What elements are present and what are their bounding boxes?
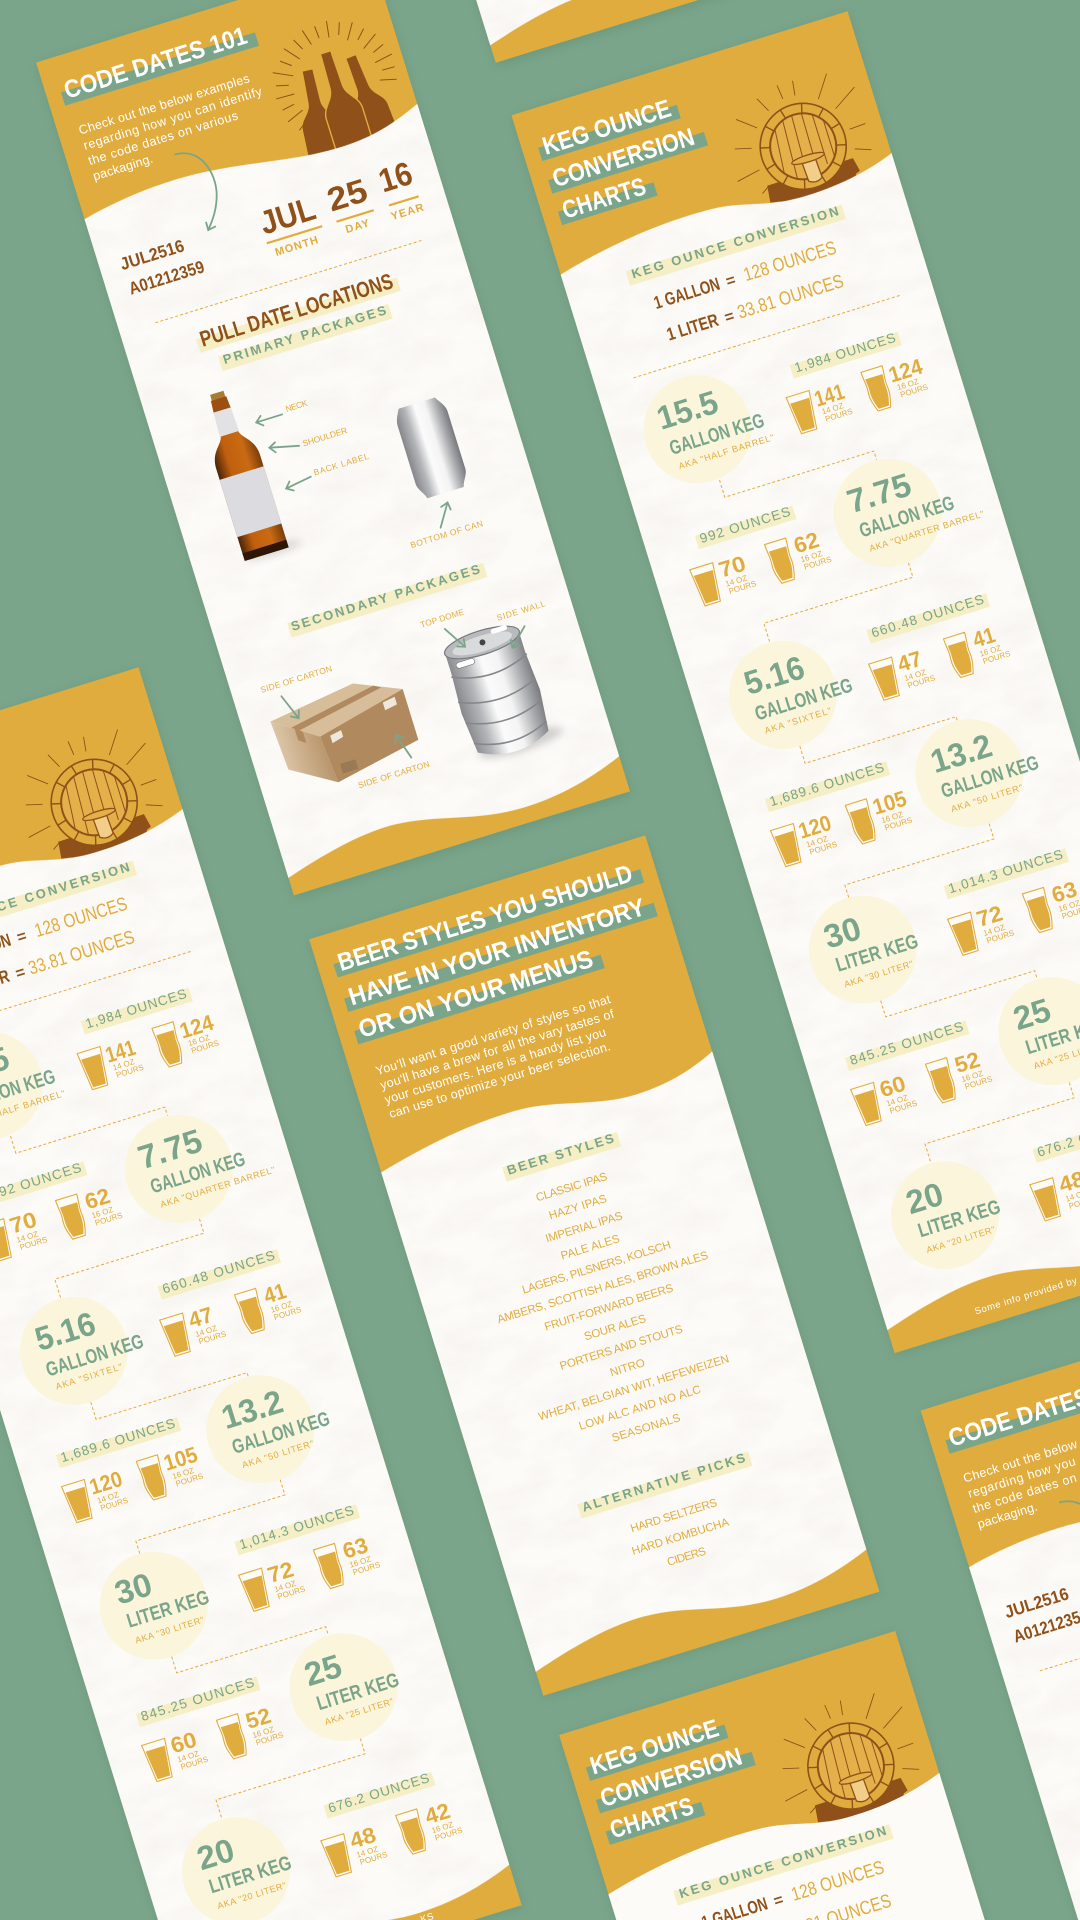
ounces label: 1,014.3 OUNCES (946, 847, 1065, 896)
row: 13.2 gallon keg (47, 1357, 342, 1542)
pours: POURS (273, 1305, 303, 1322)
pours: POURS (888, 1099, 918, 1116)
pours: POURS (179, 1755, 209, 1772)
keg circle: LITER KEG (124, 1587, 212, 1633)
conversion: gallon (0, 894, 130, 970)
paper body between waves (73, 102, 628, 883)
pours: 16 OZ (896, 377, 920, 392)
image: can (393, 395, 470, 500)
conversion: liter: 33.81 OUNCES (735, 271, 846, 324)
pours: 16 OZ (799, 549, 823, 564)
row: 15.5 gallon keg (0, 965, 228, 1153)
list: beer styles: PORTERS AND STOUTS (559, 1323, 685, 1373)
pours (689, 525, 834, 608)
row: 30 liter keg (795, 830, 1080, 1017)
row: 20 liter keg (168, 1752, 470, 1920)
code sample: JUL2516 (118, 235, 187, 274)
title (534, 87, 718, 226)
title: CHARTS (607, 1792, 697, 1844)
title: CONVERSION (597, 1743, 746, 1813)
keg circle: LITER KEG (206, 1852, 294, 1898)
pours: 14 OZ (821, 401, 845, 416)
pours: 14 OZ (885, 1093, 909, 1108)
keg circle: 20 (901, 1175, 948, 1221)
keg circle: AKA "25 LITER" (323, 1696, 395, 1727)
pours: POURS (352, 1560, 381, 1577)
pours: POURS (255, 1730, 285, 1747)
label: side of carton top: SIDE OF CARTON (259, 663, 334, 695)
image: keg (440, 616, 565, 765)
pours: 60 (167, 1727, 200, 1758)
list: beer styles: IMPERIAL IPAS (544, 1210, 624, 1245)
pours: 41 (970, 622, 998, 653)
pours: 16 OZ (90, 1205, 114, 1220)
heading: pull date locations: PULL DATE LOCATIONS (197, 268, 396, 352)
date breakdown: year: 16 (374, 154, 417, 199)
pours: POURS (276, 1584, 306, 1601)
keg circle (902, 701, 1051, 841)
keg circle: GALLON KEG (857, 492, 957, 542)
pours: 60 (876, 1071, 909, 1102)
pours: 14 OZ (805, 834, 829, 849)
label: side wall (495, 598, 555, 650)
pours: 47 (185, 1302, 216, 1333)
pours: POURS (899, 382, 929, 399)
pours: POURS (94, 1211, 124, 1228)
pours: POURS (884, 815, 913, 832)
list: beer styles: FRUIT-FORWARD BEERS (543, 1282, 675, 1334)
pours: 16 OZ (348, 1555, 372, 1570)
pours: 120 (86, 1466, 125, 1500)
row: 7.75 gallon keg (675, 434, 992, 625)
ounces label: 992 OUNCES (698, 504, 792, 546)
ounces label: 1,984 OUNCES (84, 986, 188, 1031)
keg circle: GALLON KEG (667, 410, 767, 460)
panel: beer styles (305, 833, 887, 1699)
list: beer styles: SOUR ALES (583, 1313, 648, 1343)
intro text: your customers. Here is a handy list you (383, 1025, 608, 1107)
pours (867, 619, 1013, 702)
pours: POURS (982, 649, 1012, 666)
icon: barrel (734, 74, 872, 203)
pours: 47 (894, 646, 925, 677)
code sample (1002, 1580, 1080, 1647)
ounces label: 676.2 OUNCES (326, 1770, 431, 1816)
pours: 14 OZ (903, 668, 927, 683)
pours: 52 (243, 1703, 274, 1734)
keg circle: AKA "SIXTEL" (54, 1361, 124, 1392)
row: 7.75 gallon keg (0, 1090, 283, 1281)
conversion: gallon: = (724, 272, 738, 291)
icon: barrel (26, 730, 162, 859)
heading: keg ounce conversion (0, 858, 137, 942)
label: shoulder (269, 424, 349, 458)
conversion: gallon: 128 OUNCES (741, 238, 839, 286)
heading: primary packages: PRIMARY PACKAGES (221, 302, 388, 367)
intro text (374, 992, 626, 1121)
keg circle: 25 (300, 1647, 346, 1693)
pours: 124 (177, 1009, 217, 1044)
heading: keg ounce conversion: KEG OUNCE CONVERSION (630, 203, 840, 281)
conversion: liter: 33.81 OUNCES (26, 927, 137, 980)
title (330, 856, 668, 1045)
pours: 141 (811, 379, 847, 412)
keg circle (193, 1357, 342, 1497)
image: carton box (267, 670, 423, 796)
heading: pull date locations (193, 267, 401, 353)
label: side of carton bottom (347, 728, 431, 790)
list: beer styles: CLASSIC IPAS (535, 1171, 609, 1204)
conversion: gallon (651, 238, 839, 314)
label: bottom of can: BOTTOM OF CAN (409, 518, 485, 550)
keg circle: 13.2 (926, 726, 996, 780)
ounces label: 1,689.6 OUNCES (768, 760, 886, 809)
ounces label: 845.25 OUNCES (139, 1675, 256, 1724)
intro text: the code dates on various (87, 109, 240, 168)
ounces label: 845.25 OUNCES (848, 1019, 965, 1068)
keg circle (6, 1279, 156, 1418)
intro text (77, 69, 274, 183)
heading: secondary packages: SECONDARY PACKAGES (289, 561, 482, 634)
pours: 48 (347, 1822, 379, 1854)
pours (76, 1009, 222, 1092)
keg circle: AKA "SIXTEL" (763, 705, 833, 736)
row: 25 liter keg (127, 1619, 412, 1801)
code sample: JUL2516 (1002, 1583, 1071, 1622)
pours: POURS (985, 928, 1015, 945)
label: neck: NECK (284, 398, 309, 414)
title: KEG OUNCE (587, 1714, 722, 1780)
icon: barrel (782, 1693, 920, 1822)
keg circle: AKA "50 LITER" (950, 782, 1024, 814)
keg circle: AKA "HALF BARREL" (677, 432, 776, 471)
pours: POURS (190, 1038, 220, 1055)
row: 5.16 gallon keg (6, 1231, 309, 1418)
title: OR ON YOUR MENUS (355, 945, 596, 1044)
row: 5.16 gallon keg (715, 575, 1018, 762)
connectors (718, 434, 1080, 1164)
conversion: liter: = (14, 964, 27, 983)
keg circle: 5.16 (740, 648, 809, 702)
keg circle: 7.75 (133, 1122, 206, 1176)
pours: 62 (82, 1183, 113, 1214)
list: alternative picks: HARD SELTZERS (629, 1497, 719, 1535)
label: back label (283, 451, 371, 489)
pours (946, 874, 1080, 957)
label: top dome (419, 607, 475, 657)
pours: 14 OZ (355, 1844, 379, 1860)
pours (320, 1796, 465, 1879)
list: beer styles: HAZY IPAS (548, 1193, 609, 1222)
pours: 105 (161, 1442, 200, 1476)
ounces label: 660.48 OUNCES (869, 592, 986, 641)
keg circle: GALLON KEG (230, 1408, 333, 1459)
keg circle (0, 1013, 72, 1153)
pours: 16 OZ (431, 1820, 455, 1835)
keg circle (795, 882, 931, 1017)
pours: 16 OZ (269, 1299, 293, 1315)
intro text: packaging. (91, 152, 155, 183)
panel: keg ounce conversion charts, left (0, 665, 529, 1920)
paper body (969, 1522, 1080, 1920)
keg circle (276, 1619, 412, 1755)
keg circle: AKA "20 LITER" (216, 1880, 288, 1911)
pours (158, 1275, 304, 1358)
conversion: gallon: 1 GALLON (651, 274, 722, 313)
row: 20 liter keg (877, 1096, 1080, 1283)
pours: 14 OZ (194, 1324, 218, 1339)
pours: 14 OZ (724, 573, 748, 589)
conversion: liter (664, 271, 846, 345)
pours: 42 (422, 1798, 453, 1829)
intro text (962, 1417, 1080, 1531)
keg circle: AKA "QUARTER BARREL" (868, 508, 986, 553)
pours: POURS (198, 1329, 227, 1346)
arrow (1060, 1494, 1080, 1581)
keg circle: AKA "30 LITER" (843, 959, 915, 989)
row: 13.2 gallon keg (756, 701, 1051, 886)
pours: 16 OZ (171, 1466, 195, 1481)
code sample (118, 232, 207, 299)
list: beer styles: AMBERS, SCOTTISH ALES, BROWN ALES (496, 1250, 710, 1326)
pours: POURS (434, 1826, 464, 1843)
keg circle: 7.75 (842, 466, 915, 520)
keg circle: GALLON KEG (939, 752, 1042, 803)
date breakdown: day: DAY (344, 217, 372, 236)
pours: POURS (115, 1063, 145, 1080)
pours: 63 (1049, 876, 1080, 908)
keg circle (820, 434, 992, 580)
pours: 16 OZ (251, 1725, 275, 1740)
panel: keg ounce conversion charts, bottom (559, 1631, 985, 1920)
paper body (551, 149, 1080, 1333)
keg circle (985, 963, 1080, 1099)
list: alternative picks: HARD KOMBUCHA (630, 1516, 731, 1558)
label: side wall: SIDE WALL (495, 598, 547, 623)
pours: 16 OZ (960, 1069, 984, 1084)
pours: 63 (340, 1532, 371, 1564)
conversion: liter (0, 927, 137, 1001)
pours (849, 1045, 995, 1128)
pours: 72 (973, 900, 1006, 932)
keg circle (168, 1803, 305, 1920)
pours (785, 353, 931, 436)
pours: POURS (99, 1496, 129, 1513)
list: beer styles: LOW ALC AND NO ALC (578, 1384, 702, 1433)
pours: 141 (102, 1035, 138, 1068)
code sample: A01212359 (126, 256, 207, 299)
pours: 124 (886, 353, 926, 388)
ounces label: 1,014.3 OUNCES (237, 1503, 356, 1552)
pours: 14 OZ (112, 1057, 136, 1072)
title: BEER STYLES YOU SHOULD (334, 859, 636, 977)
pours: 16 OZ (880, 810, 904, 825)
keg circle: 30 (110, 1565, 156, 1612)
keg circle: LITER KEG (833, 931, 921, 977)
connectors (9, 1090, 371, 1820)
row: 15.5 gallon keg (630, 309, 937, 497)
ounces label: 1,984 OUNCES (793, 330, 897, 375)
title: KEG OUNCE (539, 95, 674, 161)
pours: 105 (870, 786, 909, 820)
conversion: liter: 1 LITER (664, 310, 721, 345)
pours: 16 OZ (978, 643, 1002, 659)
conversion: gallon: = (772, 1891, 786, 1910)
keg circle: 13.2 (217, 1382, 287, 1436)
pours: POURS (175, 1471, 204, 1488)
pours: 14 OZ (176, 1749, 200, 1764)
list: alternative picks (624, 1495, 737, 1578)
ounces label: 660.48 OUNCES (160, 1248, 277, 1297)
image: bottle (195, 382, 303, 565)
keg circle: AKA "30 LITER" (134, 1615, 206, 1645)
paper body (0, 805, 522, 1920)
label: side of carton bottom: SIDE OF CARTON (357, 759, 431, 790)
label: back label: BACK LABEL (312, 451, 371, 477)
label: neck (254, 398, 309, 423)
pours: POURS (824, 407, 854, 424)
arrow: curved arrow to code (175, 146, 228, 233)
date breakdown: month: MONTH (274, 234, 321, 259)
date breakdown: year: YEAR (390, 201, 426, 223)
pours (140, 1701, 286, 1784)
pours: POURS (728, 579, 757, 596)
panel: code dates 101 (28, 0, 634, 902)
keg circle: LITER KEG (314, 1669, 402, 1715)
pours (237, 1530, 383, 1613)
title: CONVERSION (549, 123, 698, 193)
pours: 52 (952, 1047, 983, 1078)
date breakdown: year (374, 154, 426, 223)
heading: beer styles: BEER STYLES (505, 1130, 616, 1178)
list: beer styles: LAGERS, PILSNERS, KOLSCH (521, 1239, 672, 1297)
keg circle (86, 1538, 222, 1673)
keg circle: 5.16 (31, 1304, 100, 1358)
pours: 14 OZ (15, 1229, 39, 1245)
date breakdown: month: JUL (255, 189, 320, 241)
pours: 70 (716, 551, 749, 583)
keg circle (630, 357, 781, 497)
keg circle: 20 (192, 1831, 239, 1877)
keg circle: LITER KEG (915, 1196, 1003, 1242)
date breakdown: day: 25 (322, 171, 372, 218)
panel: code dates 101, bottom right (920, 1361, 1080, 1920)
heading: alternative picks: ALTERNATIVE PICKS (580, 1450, 747, 1515)
paper body (371, 1046, 879, 1674)
keg circle: AKA "QUARTER BARREL" (159, 1164, 277, 1209)
conversion: gallon: = (15, 928, 29, 947)
pours: POURS (964, 1074, 994, 1091)
list: beer styles: WHEAT, BELGIAN WIT, HEFEWEIZEN (537, 1353, 731, 1423)
keg circle: GALLON KEG (148, 1148, 248, 1198)
pours (769, 786, 915, 869)
title (582, 1707, 766, 1846)
intro text: packaging. (976, 1500, 1039, 1531)
date breakdown: day (322, 171, 379, 239)
title: CHARTS (559, 172, 649, 225)
keg circle (877, 1147, 1014, 1283)
intro text: regarding how you can identify (82, 84, 264, 153)
intro text: you'll have a brew for all the vary tastes of (378, 1007, 616, 1092)
conversion: liter: = (723, 308, 736, 327)
pours: POURS (803, 555, 833, 572)
list: beer styles: PALE ALES (559, 1233, 622, 1263)
keg circle: 30 (819, 909, 865, 956)
keg circle: 25 (1009, 991, 1055, 1037)
list: beer styles (465, 1149, 753, 1467)
title: code dates 101: CODE DATES 101 (61, 22, 251, 105)
conversion: gallon (699, 1857, 887, 1920)
pours: 70 (7, 1207, 40, 1239)
conversion: gallon: 128 OUNCES (789, 1857, 887, 1906)
ounces label: 1,689.6 OUNCES (59, 1416, 177, 1465)
ounces label (1032, 1113, 1080, 1163)
keg circle: GALLON KEG (43, 1330, 146, 1381)
pours: 72 (264, 1556, 297, 1588)
keg circle: AKA "50 LITER" (241, 1438, 315, 1470)
title: HAVE IN YOUR INVENTORY (345, 893, 649, 1011)
intro text: Check out the below examples (77, 71, 251, 137)
list: beer styles: NITRO (609, 1357, 647, 1379)
label: bottom of can (402, 494, 485, 550)
panel: keg ounce conversion charts, right (508, 9, 1080, 1356)
row: 30 liter keg (86, 1486, 388, 1673)
list: beer styles: SEASONALS (611, 1412, 682, 1445)
paper body (608, 1772, 985, 1920)
keg circle (715, 623, 865, 762)
label: shoulder: SHOULDER (301, 425, 349, 448)
panel: top sliver, bottom of a code dates panel (476, 0, 706, 63)
pours: 62 (791, 527, 822, 558)
pours: 14 OZ (96, 1490, 120, 1505)
heading: keg ounce conversion: KEG OUNCE CONVERSION (677, 1823, 888, 1901)
keg circle: 15.5 (652, 383, 722, 437)
pours: 16 OZ (187, 1033, 211, 1048)
pours (1029, 1140, 1080, 1223)
pours: POURS (808, 840, 838, 857)
pours: 41 (261, 1278, 289, 1309)
row: 25 liter keg (836, 963, 1080, 1145)
icon: three beer bottles with rays (272, 20, 397, 156)
pours: POURS (359, 1850, 389, 1867)
keg circle: AKA "20 LITER" (925, 1224, 997, 1255)
list: alternative picks: CIDERS (666, 1546, 708, 1569)
intro text: You'll want a good variety of styles so that (374, 992, 613, 1078)
label: side of carton top (259, 663, 344, 726)
pours (0, 1181, 125, 1264)
keg circle: GALLON KEG (752, 674, 855, 725)
conversion: gallon: 128 OUNCES (32, 894, 130, 942)
keg circle (111, 1090, 283, 1236)
pours: POURS (907, 673, 936, 690)
pours: POURS (19, 1235, 48, 1252)
pours (60, 1442, 206, 1525)
pours: 14 OZ (273, 1579, 297, 1594)
label: top dome: TOP DOME (419, 607, 466, 630)
pours: 14 OZ (982, 923, 1006, 938)
intro text: can use to optimize your beer selection. (387, 1039, 612, 1121)
pours: 120 (795, 810, 834, 844)
